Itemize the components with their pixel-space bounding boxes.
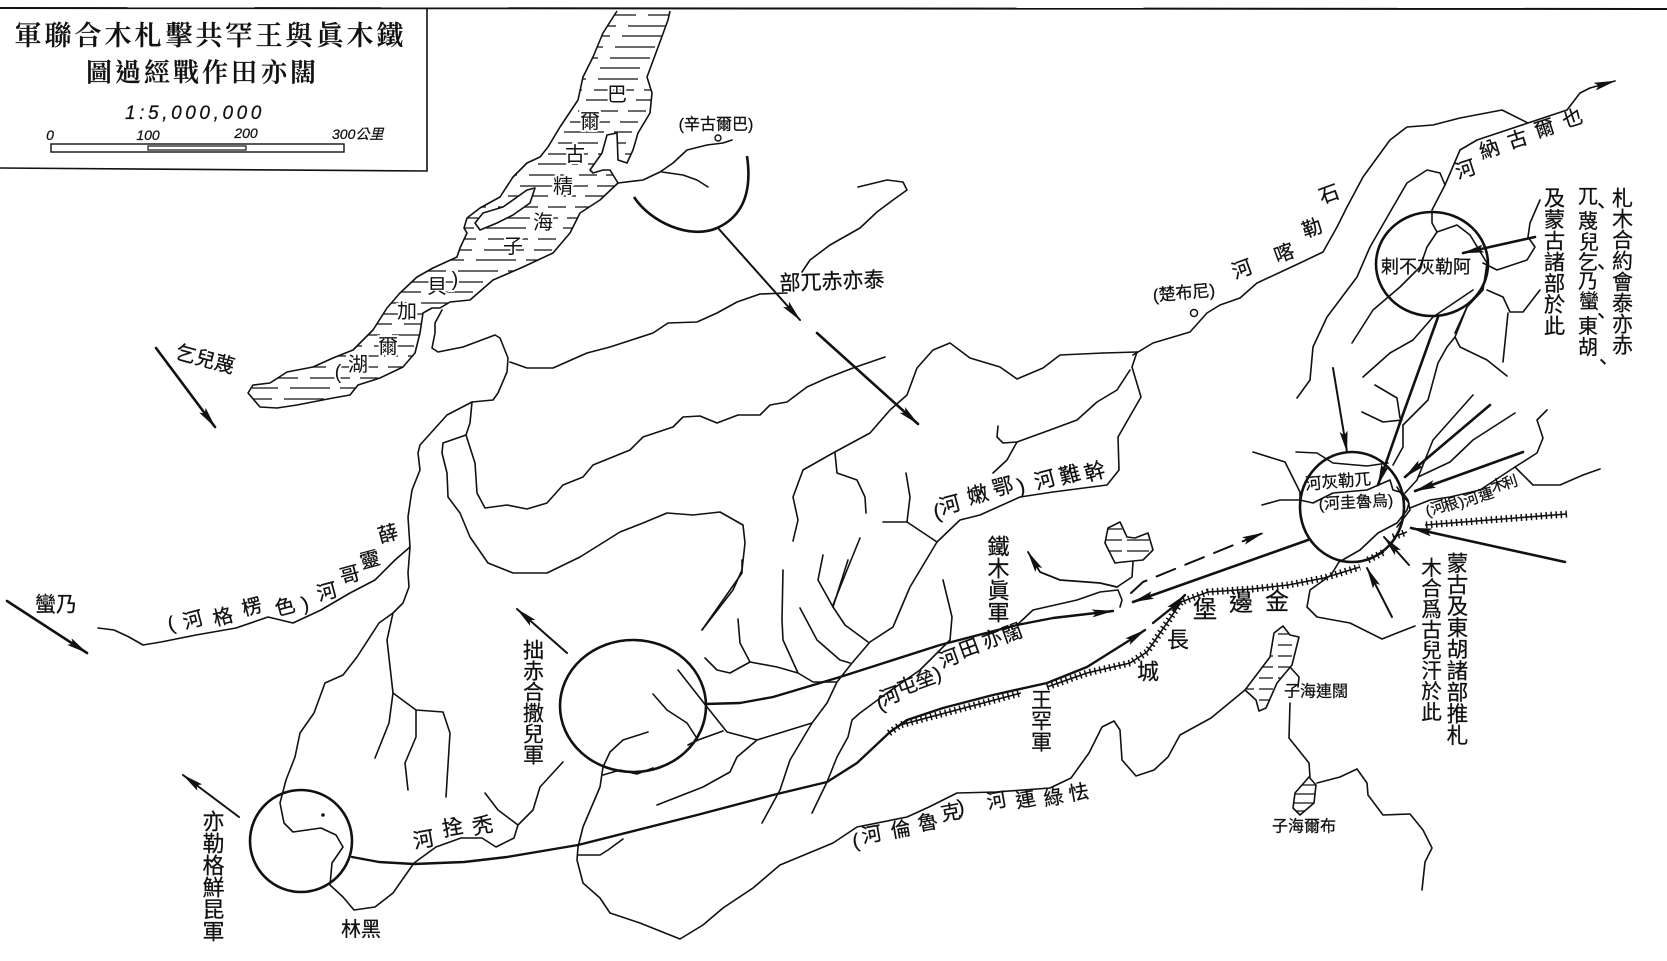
label: 札木合約會泰亦赤: 札木合約會泰亦赤 xyxy=(1610,187,1633,355)
label: 乃蠻: 蠻乃 xyxy=(35,594,77,616)
label: 阿勒灰不剌: 剌不灰勒阿 xyxy=(1381,257,1471,277)
scale bar: 200 xyxy=(233,125,258,141)
line: Wang Khan route xyxy=(352,630,1145,864)
label: 斡難河: (河嫩鄂)河難幹 xyxy=(931,459,1108,524)
arrow: far northeast xyxy=(1590,81,1615,88)
arrow: north down xyxy=(1333,368,1347,452)
label: 兀蔑兒乞乃蠻東胡: 兀、蔑兒乞、乃蠻、東胡、 xyxy=(1578,186,1613,374)
arrow: northeast one xyxy=(1405,405,1490,477)
arrow: south b xyxy=(1367,568,1392,617)
arrow: Naiman xyxy=(7,601,87,653)
label: 巴爾古精海子(貝加爾湖): 巴爾古精海子)貝加爾湖( xyxy=(335,84,627,384)
lake: small lake xyxy=(1104,521,1154,564)
place: 辛古爾巴: (辛古爾巴) xyxy=(679,116,753,134)
label: 泰亦赤兀部: 部兀赤亦泰 xyxy=(779,269,885,295)
label: 王罕軍: 王罕軍 xyxy=(1028,689,1052,752)
rivers: network xyxy=(98,88,1600,939)
arrow: dashed retreat xyxy=(1131,533,1263,593)
label: 怯綠連河 克魯倫河: (河倫魯克)河連綠怯 xyxy=(851,780,1091,853)
arrow: south a xyxy=(1384,537,1409,565)
label: 金邊堡: 堡邊金 xyxy=(1193,588,1289,624)
label: 拙赤合撒兒軍: 拙赤合撒兒軍 xyxy=(520,639,544,765)
lake: Baikal xyxy=(246,11,680,408)
scale bar: 0 xyxy=(46,127,54,143)
arrow: to Abunan circle xyxy=(1463,237,1535,253)
arrow: from Khingan circle southeast xyxy=(718,228,800,320)
label: 亦勒格鮮昆軍: 亦勒格鮮昆軍 xyxy=(200,810,224,942)
title line 2: 圖過經戰作田亦闊 xyxy=(86,58,316,88)
label: 兀勒灰河: 河灰勒兀 xyxy=(1304,469,1372,494)
label: 鐵木真軍: 鐵木眞軍 xyxy=(984,535,1010,623)
scale bar xyxy=(46,125,384,152)
arrow: east one xyxy=(1415,452,1523,491)
label: 闊亦田河 屯垒河: (河屯垒)河田亦闊 xyxy=(874,620,1026,716)
map frame top rule xyxy=(0,8,1667,9)
scale bar: 100 xyxy=(136,127,160,143)
label: 闊連海子: 子海連闊 xyxy=(1284,682,1348,700)
wall: Great wall hatch line xyxy=(889,532,1407,733)
circle: central camp xyxy=(560,640,706,772)
circle: Ulkhui river camp xyxy=(1300,452,1404,562)
arrow: hatched eastern attack xyxy=(1425,514,1567,525)
place: 楚布尼 xyxy=(1152,281,1216,316)
partial circle: Khingan pass xyxy=(634,156,748,232)
panel: title and scale box xyxy=(0,8,427,171)
label: 及蒙古諸部於此: 及蒙古諸部於此 xyxy=(1541,187,1565,337)
label: 黑林: 林黑 xyxy=(341,918,381,941)
label: 也爾古納河: 河納古爾也 xyxy=(1452,105,1586,184)
label: 長城: 城長 xyxy=(1137,628,1189,684)
label: 乞兒蔑: 乞兒蔑 xyxy=(173,341,237,378)
line: Koyiten river main route xyxy=(705,611,1113,704)
arrow: Wang Khan final segment xyxy=(1153,595,1185,623)
circle: Abunan xyxy=(1376,212,1488,316)
arrow: Tayichiut advance xyxy=(817,333,918,424)
arrow: Jochi Khasar xyxy=(517,609,567,653)
label: 木合爲古兒汗於此: 木合爲古兒汗於此 xyxy=(1418,557,1442,722)
scale bar: 300公里 xyxy=(332,126,384,142)
place: 辛古爾巴 xyxy=(679,116,753,141)
circle: 闊亦田 west Ilgeshikun camp xyxy=(250,790,352,892)
label: 色楞格河 薛靈哥河: (河格楞色)河哥靈薛 xyxy=(165,520,401,636)
label: 石勒喀河: 河喀勒石 xyxy=(1229,181,1343,284)
arrow: solid west xyxy=(1133,540,1308,602)
lake: 布爾海子 xyxy=(1292,776,1317,816)
label: 烏圭魯河: (河圭魯烏) xyxy=(1318,492,1394,513)
label: 利木連河 根河: (河根)河連木利 xyxy=(1423,472,1520,520)
arrow: Temujin curve xyxy=(1028,552,1117,587)
arrow: Merkit xyxy=(156,348,215,427)
title line 1: 軍聯合木札擊共罕王與眞木鐵 xyxy=(14,21,404,51)
map scale ratio: 1:5,000,000 xyxy=(125,103,265,124)
arrow: Ilgeshikun xyxy=(183,775,239,817)
place: 楚布尼: (楚布尼) xyxy=(1152,281,1216,305)
label: 秃拴河: 河拴秃 xyxy=(411,813,495,853)
lake: 闊連海子 xyxy=(1244,625,1300,712)
arrow: southeast long xyxy=(1411,528,1565,562)
label: 布爾海子: 子海爾布 xyxy=(1272,818,1336,836)
arrow: Abunan to central xyxy=(1378,317,1438,485)
label: 蒙古及東胡諸部推札: 蒙古及東胡諸部推札 xyxy=(1444,552,1468,746)
